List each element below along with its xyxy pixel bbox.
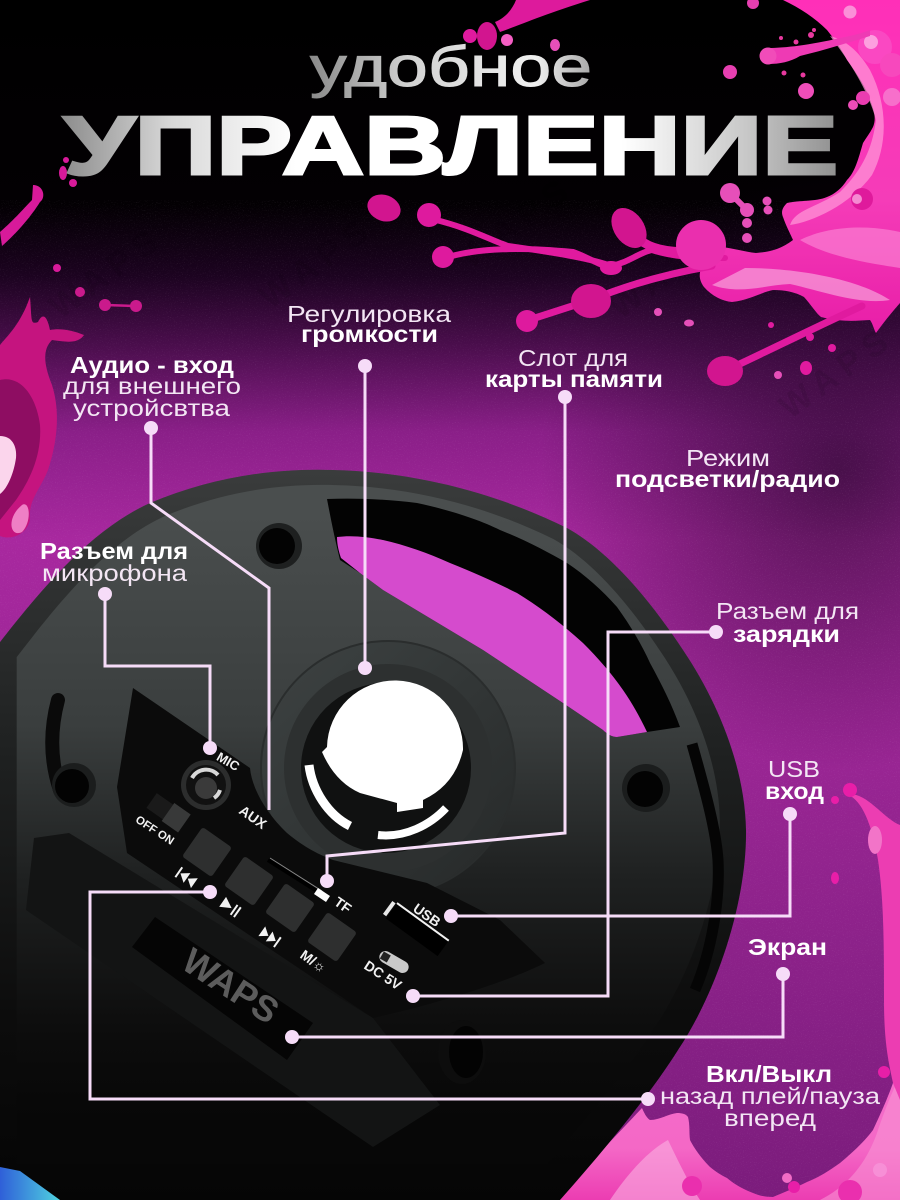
title large: УПРАВЛЕНИЕ [64, 99, 838, 192]
label USB: USB [410, 900, 444, 930]
hub white centre [322, 680, 463, 812]
callout: charging: Разъем для [716, 598, 859, 624]
callout: backlight mode: Режим [686, 445, 770, 471]
handle opening [327, 499, 680, 737]
callout: backlight mode [615, 445, 840, 492]
mic jack [181, 760, 231, 810]
title small: удобное [310, 35, 592, 99]
splash: top right [700, 0, 900, 333]
right slot [692, 744, 718, 990]
screw hole left [52, 763, 96, 807]
label mode: M/☼ [297, 946, 330, 976]
left slot [52, 700, 60, 790]
callout: audio input: устройсвтва [73, 395, 230, 421]
callout: microphone: Разъем для [40, 538, 188, 564]
callout: power and playback [90, 885, 880, 1131]
icon: next [258, 926, 282, 948]
callout: screen: Экран [748, 934, 827, 960]
callout: memory card: Слот для [518, 345, 628, 371]
speaker body [0, 470, 746, 1200]
lower display block [26, 833, 440, 1147]
hub ring [261, 641, 515, 895]
handle see-through [337, 536, 647, 737]
label MIC: MIC [214, 749, 243, 774]
button 1 [182, 827, 232, 877]
hub recess [301, 683, 471, 853]
splash: top centre [463, 0, 590, 51]
outer rim [0, 470, 746, 1200]
button 3 [265, 883, 315, 933]
splash: bottom right [555, 783, 900, 1200]
splash: left [0, 287, 142, 537]
callout: backlight mode: подсветки/радио [615, 466, 840, 492]
callout: memory card [320, 345, 663, 888]
callout: audio input: для внешнего [63, 373, 241, 399]
callout: volume [287, 301, 451, 675]
watermark pattern: WAPS [252, 208, 382, 316]
callout: power and playback: вперед [724, 1105, 817, 1131]
front face [17, 485, 720, 1164]
callout: USB: вход [765, 778, 824, 804]
bottom LED strip [0, 1167, 60, 1200]
USB port [382, 899, 449, 956]
callout: charging [406, 598, 859, 1003]
callout: screen [285, 934, 827, 1044]
DC port [377, 949, 411, 975]
watermark pattern: WAPS [452, 168, 582, 276]
callout: volume: громкости [301, 321, 438, 347]
callout: volume: Регулировка [287, 301, 451, 327]
SD slot [268, 858, 330, 902]
hub white arcs [309, 765, 446, 835]
callout: power and playback: назад плей/пауза [660, 1083, 880, 1109]
callout: microphone: микрофона [42, 560, 187, 586]
label OFF ON: OFF ON [133, 814, 176, 848]
label AUX: AUX [236, 802, 270, 832]
screen [132, 917, 313, 1060]
brand logo: WAPS [175, 940, 286, 1032]
callout: memory card: карты памяти [485, 366, 663, 392]
callout: power and playback: Вкл/Выкл [706, 1061, 832, 1087]
screw hole bottom [438, 1020, 486, 1084]
screw hole right [622, 764, 670, 812]
callout: USB: USB [768, 756, 820, 782]
screw hole top [256, 523, 302, 569]
callout: microphone [40, 538, 217, 755]
splash: left drops [0, 157, 83, 297]
label DC 5V: DC 5V [361, 957, 405, 993]
power switch [145, 792, 191, 832]
icon: play pause [219, 897, 242, 918]
control panel [117, 688, 545, 1018]
watermark pattern [42, 168, 900, 426]
label TF: TF [331, 894, 355, 917]
callout: USB [444, 756, 824, 923]
right edge band [848, 794, 900, 1100]
callout: charging: зарядки [733, 621, 840, 647]
callout: audio input [63, 352, 269, 810]
icon: previous [175, 867, 198, 888]
watermark pattern: WAPS [772, 318, 900, 426]
watermark pattern: WAPS [42, 218, 172, 326]
splash: tendrils [364, 183, 862, 386]
button 4 [307, 912, 357, 962]
watermark pattern: WAPS [602, 218, 732, 326]
button 2 [224, 856, 274, 906]
callout: audio input: Аудио - вход [70, 352, 234, 378]
